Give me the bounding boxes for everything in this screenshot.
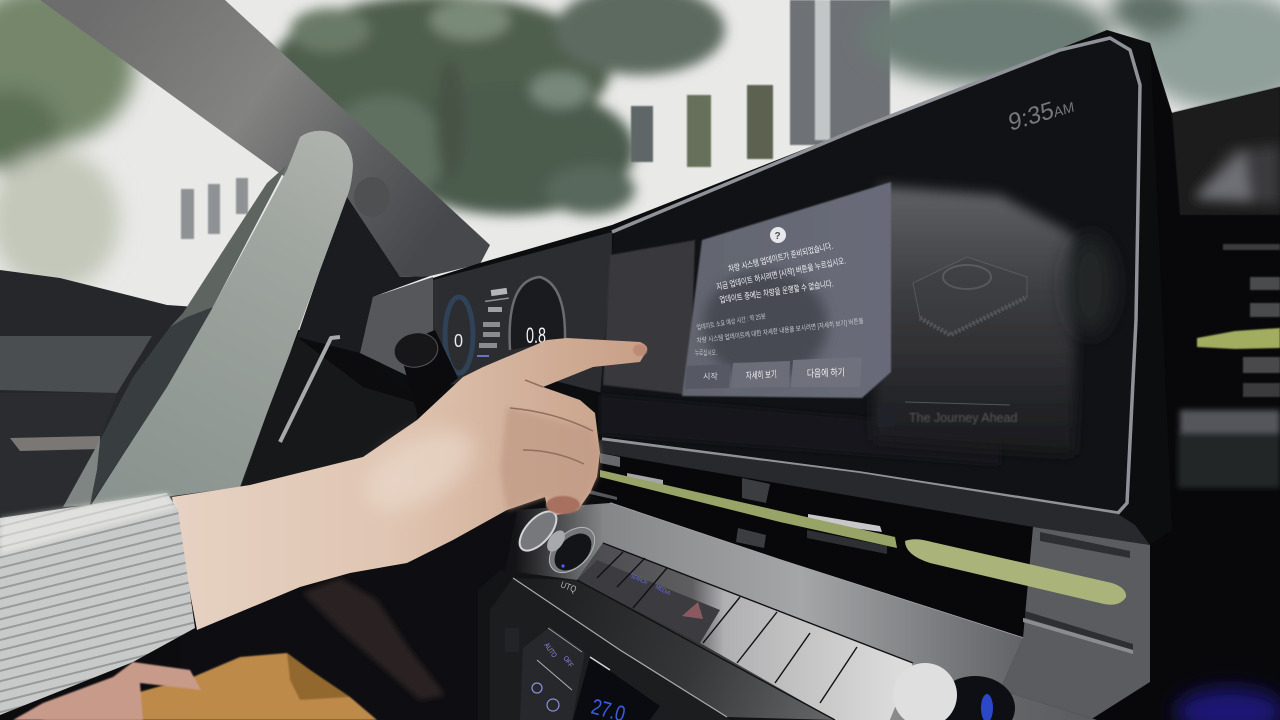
- fingers shadow: [500, 407, 600, 510]
- dialog buttons: [685, 357, 862, 389]
- dialog details: 업데이트 소요 예상 시간 : 약 25분: [696, 311, 767, 332]
- other hand on lap: [13, 662, 201, 720]
- dialog message: 차량 시스템 업데이트가 준비되었습니다.: [727, 240, 834, 274]
- building windows: [631, 85, 773, 167]
- lower left footwell: [180, 500, 520, 720]
- lower slat: [1178, 410, 1280, 488]
- hand highlights: [353, 414, 487, 526]
- dash deck surface: [478, 503, 1097, 720]
- chip illustration: [913, 257, 1027, 335]
- ring dial: [513, 505, 563, 557]
- textured lower section: [90, 307, 213, 505]
- key labels: SEARCH: [629, 573, 648, 586]
- white building left: [181, 178, 248, 239]
- question icon: ?: [774, 231, 781, 242]
- clock: 9:35AM: [1007, 90, 1076, 137]
- dialog message: [715, 240, 847, 305]
- deck seam: [610, 503, 1023, 638]
- dialog details: 차량 시스템 업데이트에 대한 자세한 내용을 보시려면 [자세히 보기] 버튼을: [696, 316, 864, 345]
- steering wheel: [63, 131, 353, 507]
- sleeve highlight: [0, 493, 177, 555]
- windshield pillar: [40, 0, 490, 277]
- key labels: MEDIA: [654, 584, 671, 597]
- dialog buttons: 다음에 하기: [807, 366, 845, 380]
- green accent strip: [600, 470, 1126, 605]
- grey building right: [790, 0, 890, 145]
- button seams: [577, 543, 913, 720]
- cluster side of display: [360, 277, 433, 388]
- dialog details: [695, 311, 864, 357]
- question icon: [770, 227, 786, 243]
- rotary knob: [541, 519, 603, 581]
- arm and pointing hand: [172, 338, 647, 630]
- dark cowl under pillar: [297, 197, 430, 353]
- right side trim panel: [1000, 527, 1150, 720]
- side vent louvers: [505, 628, 519, 652]
- dialog buttons: 시작: [703, 371, 718, 381]
- main glass: [600, 40, 1138, 511]
- climate panel: AUTO: [542, 641, 559, 659]
- left tile of display: [603, 240, 695, 395]
- left window trees: [0, 0, 135, 290]
- fingertip: [633, 344, 647, 356]
- glass under dialog: [600, 395, 1000, 465]
- dialog buttons: 자세히 보기: [746, 369, 777, 382]
- deck seam highlight: [513, 578, 727, 717]
- central tree: [270, 0, 725, 215]
- climate panel: OFF: [561, 655, 574, 669]
- knit sleeve: [0, 493, 195, 715]
- outer rim: [63, 440, 100, 507]
- center console right column: [1090, 43, 1280, 720]
- dashboard screen housing: [360, 30, 1172, 545]
- instrument cluster: [445, 277, 565, 373]
- media card: The Journey Ahead: [909, 411, 1017, 425]
- indicator stalk: [391, 329, 458, 413]
- silver bezel: [602, 38, 1140, 513]
- right trees: [860, 0, 1280, 110]
- finger seams: [510, 380, 593, 464]
- instrument cluster: 0.8: [526, 323, 546, 348]
- blue glow: [1175, 688, 1280, 720]
- speaker grille: [354, 177, 390, 217]
- paddle shifter: [280, 337, 340, 442]
- key strip: [577, 543, 913, 720]
- climate display: [573, 657, 660, 720]
- reflection on glass: [873, 186, 1075, 455]
- climate icons: [532, 683, 559, 711]
- air vent band: [590, 440, 1150, 638]
- green accent right: [1197, 328, 1280, 349]
- back rim: [170, 165, 287, 327]
- lower console panel: [478, 570, 835, 720]
- bottom-right rotary knob: [893, 663, 1015, 720]
- thumb tip: [546, 496, 580, 514]
- volume label: UTQ: [559, 579, 578, 594]
- dialog message: 지금 업데이트 하시려면 [시작] 버튼을 누르십시오.: [715, 254, 847, 292]
- steering column hub: [240, 337, 417, 490]
- main spoke: [90, 131, 353, 507]
- key labels: [629, 573, 671, 597]
- vent fins: [590, 453, 887, 554]
- door handle: [10, 436, 100, 451]
- orange trousers: [40, 653, 377, 720]
- update dialog: [682, 182, 891, 398]
- dialog message: 업데이트 중에는 차량을 운행할 수 없습니다.: [719, 277, 834, 305]
- climate panel: [520, 627, 585, 720]
- vent slats: [1223, 244, 1280, 397]
- outdoor background: [0, 0, 1280, 330]
- media card: [878, 402, 1017, 427]
- wood-toned knee trim: [303, 578, 445, 700]
- hazard triangle: [682, 602, 703, 619]
- dialog details: 누르십시오.: [695, 348, 717, 357]
- door panel: [0, 270, 300, 530]
- instrument cluster: 0: [454, 331, 463, 351]
